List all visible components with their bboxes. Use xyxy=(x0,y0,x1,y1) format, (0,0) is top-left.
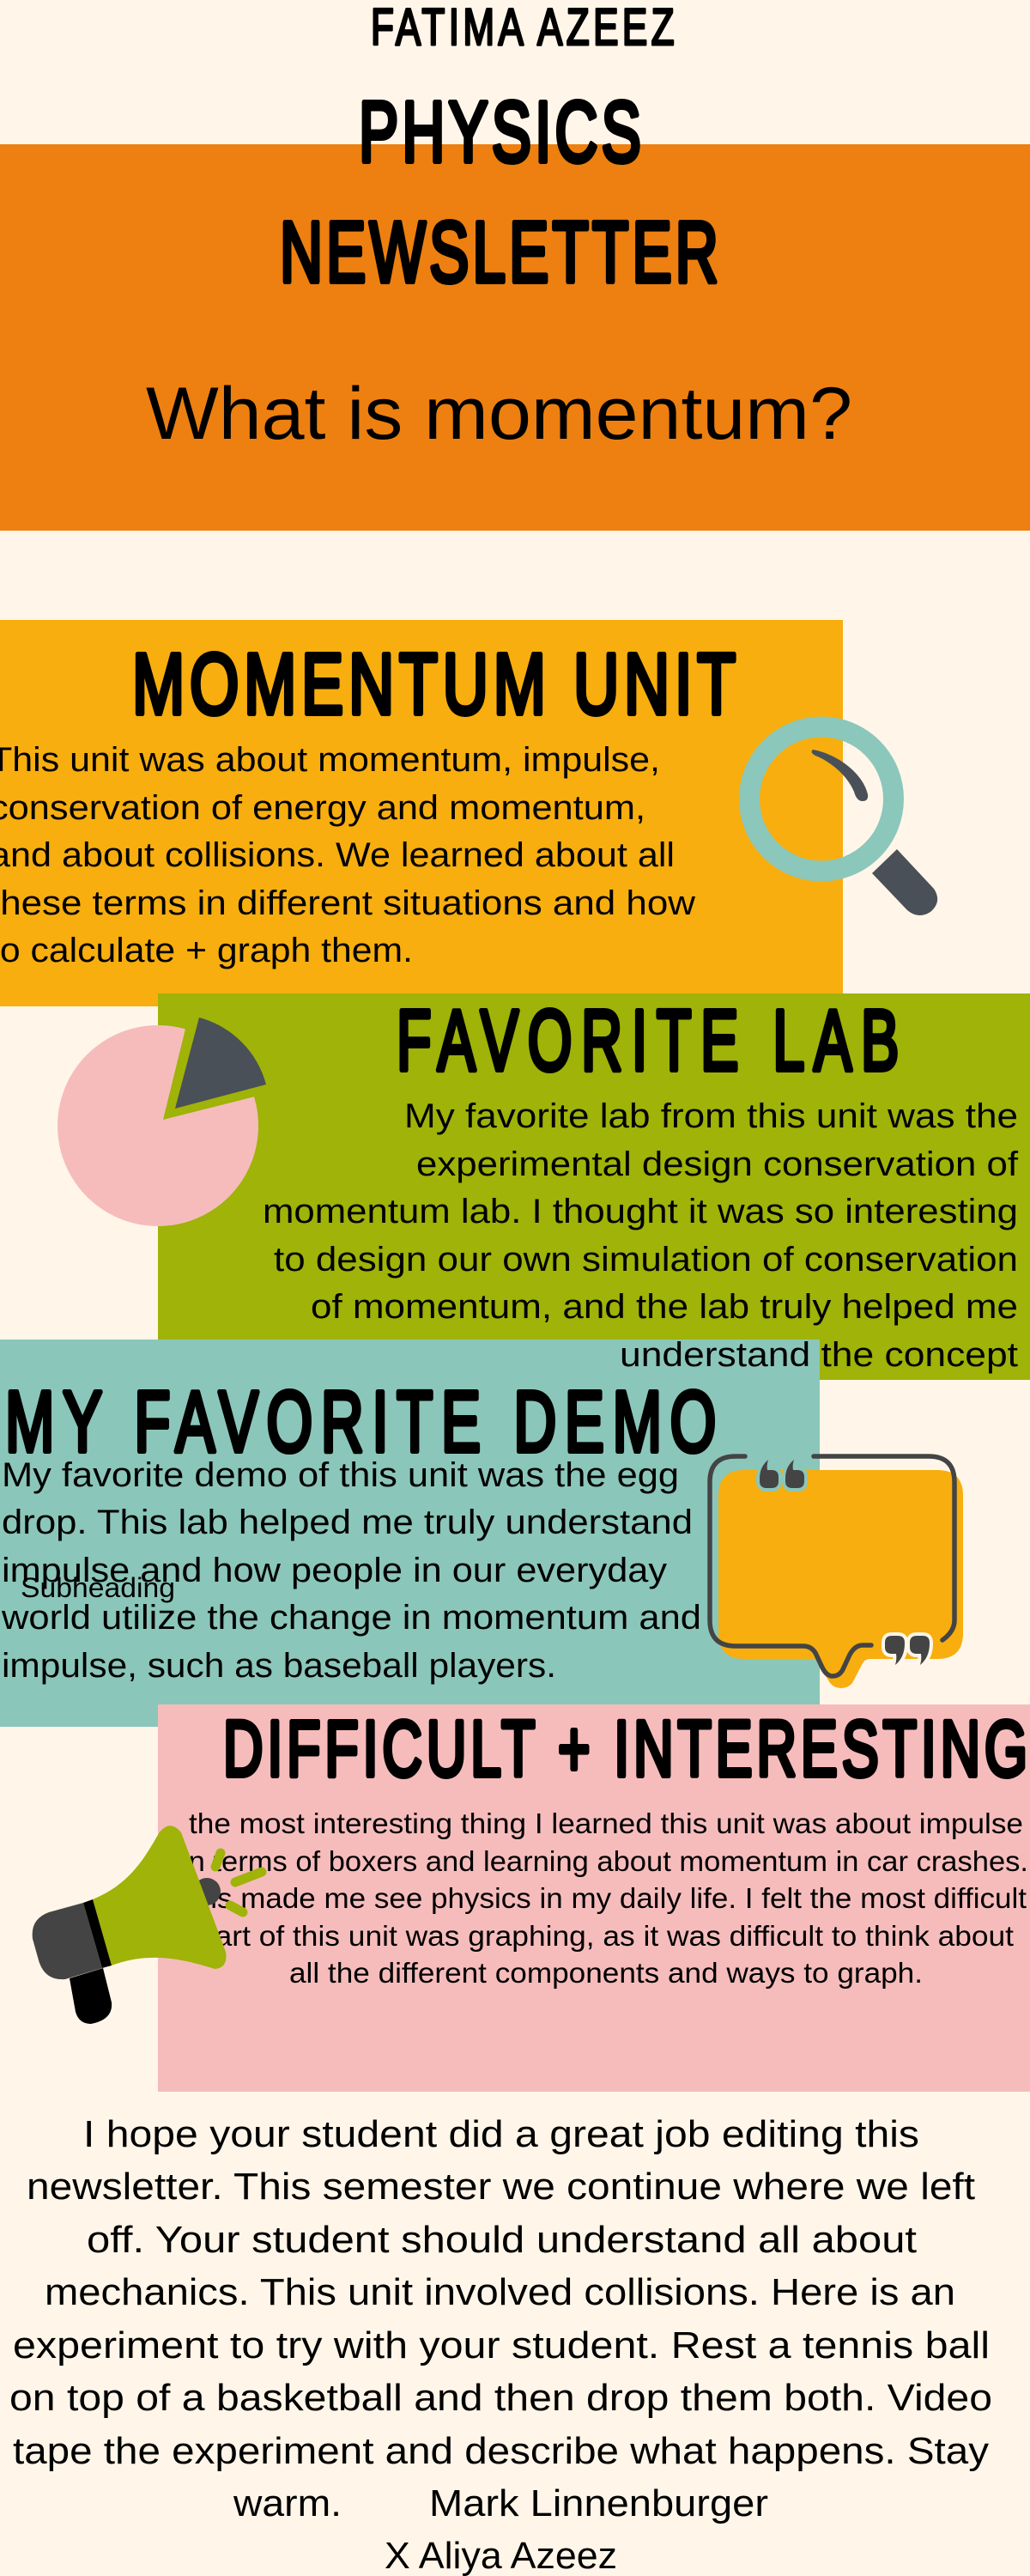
orange title band xyxy=(0,144,1030,531)
heading: momentum unit: MOMENTUM UNIT xyxy=(132,636,741,732)
body text: favorite lab: experimental design conservation of xyxy=(416,1145,1019,1183)
body text: favorite lab xyxy=(263,1097,1019,1326)
panel: favorite lab xyxy=(158,993,1030,1380)
heading: my favorite demo: MY FAVORITE DEMO xyxy=(5,1374,724,1470)
body text: favorite lab: to design our own simulation of conservation xyxy=(274,1241,1018,1279)
body text: my favorite demo: impulse and how people in our everyday xyxy=(2,1552,667,1589)
body text: my favorite demo: My favorite demo of this unit was the egg xyxy=(2,1456,679,1494)
closing message: off. Your student should understand all about xyxy=(87,2219,917,2261)
icon: speech bubble xyxy=(710,1456,963,1688)
body text: momentum unit: and about collisions. We learned about all xyxy=(0,836,675,874)
panel: momentum unit xyxy=(0,620,843,1006)
closing message: on top of a basketball and then drop them both. Video xyxy=(9,2377,992,2419)
body text: difficult + interesting xyxy=(182,1807,1028,1989)
title: physics newsletter xyxy=(280,84,722,301)
author name: FATIMA AZEEZ xyxy=(371,0,678,56)
body text: difficult + interesting: all the different components and ways to graph. xyxy=(289,1957,923,1989)
closing message: newsletter. This semester we continue where we left xyxy=(27,2166,975,2208)
body text: difficult + interesting: the most interesting thing I learned this unit was about impulse xyxy=(189,1807,1023,1839)
closing message: tape the experiment and describe what happens. Stay xyxy=(13,2430,989,2472)
body text: favorite lab: My favorite lab from this unit was the xyxy=(404,1097,1018,1135)
closing message: I hope your student did a great job editing this xyxy=(83,2113,919,2155)
body text: my favorite demo xyxy=(1,1456,701,1685)
text: last line of favorite lab: understand the concept xyxy=(620,1336,1018,1374)
subheading placeholder: Subheading xyxy=(21,1572,175,1603)
icon: pie chart xyxy=(58,1018,266,1226)
body text: momentum unit: conservation of energy and momentum, xyxy=(0,789,645,827)
closing message: warm. xyxy=(233,2482,342,2524)
body text: favorite lab: momentum lab. I thought it was so interesting xyxy=(263,1193,1018,1230)
icon: megaphone xyxy=(33,1826,262,2024)
body text: difficult + interesting: this made me see physics in my daily life. I felt the most difficult xyxy=(185,1882,1027,1914)
title: physics newsletter: PHYSICS xyxy=(359,84,645,180)
panel: my favorite demo xyxy=(0,1340,820,1727)
icon: magnifying glass xyxy=(749,726,937,915)
closing message: Mark Linnenburger xyxy=(429,2482,768,2524)
subtitle: what is momentum: What is momentum? xyxy=(146,373,852,455)
body text: difficult + interesting: part of this unit was graphing, as it was difficult to think about xyxy=(198,1920,1014,1952)
panel: difficult + interesting xyxy=(158,1704,1030,2092)
body text: favorite lab: of momentum, and the lab truly helped me xyxy=(311,1288,1018,1326)
closing message: mechanics. This unit involved collisions. Here is an xyxy=(45,2271,955,2313)
closing message: experiment to try with your student. Rest a tennis ball xyxy=(13,2324,990,2366)
body text: my favorite demo: world utilize the change in momentum and xyxy=(1,1599,701,1637)
body text: difficult + interesting: in terms of boxers and learning about momentum in car crashes. xyxy=(182,1845,1028,1877)
body text: my favorite demo: impulse, such as baseball players. xyxy=(2,1647,556,1685)
title: physics newsletter: NEWSLETTER xyxy=(280,204,722,301)
body text: momentum unit: these terms in different situations and how xyxy=(0,884,695,922)
closing message: X Aliya Azeez xyxy=(385,2535,617,2576)
body text: momentum unit: This unit was about momentum, impulse, xyxy=(0,741,660,779)
closing message xyxy=(9,2113,992,2576)
body text: momentum unit: to calculate + graph them. xyxy=(0,932,413,969)
body text: momentum unit xyxy=(0,741,695,969)
body text: my favorite demo: drop. This lab helped me truly understand xyxy=(2,1504,693,1541)
